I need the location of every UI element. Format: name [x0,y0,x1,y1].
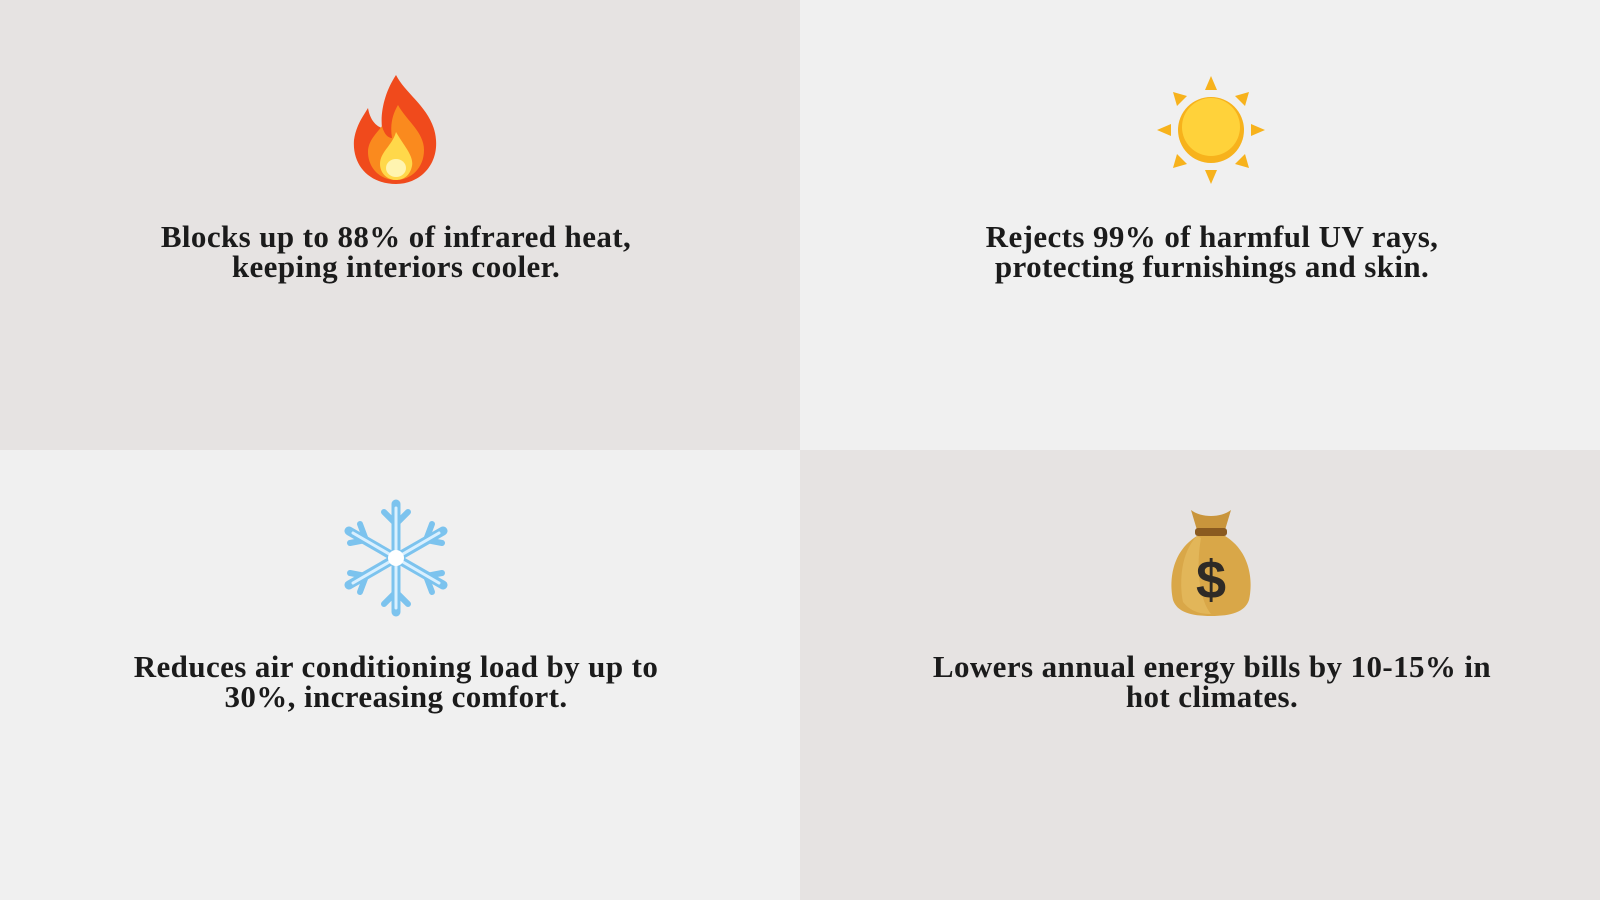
icon: snowflake [344,500,448,616]
text: energy bills [933,649,1491,714]
text: UV rays [986,219,1438,284]
panel: UV rays [800,0,1600,450]
text: infrared heat: keeping interiors cooler. [232,249,560,284]
icon: sun [1157,76,1265,184]
icon: fire [354,75,436,184]
icon: money bag [1171,510,1251,616]
panel: energy bills [800,450,1600,900]
text: air conditioning: Reduces air conditioning load by up to [134,649,658,684]
panel: infrared heat [0,0,800,450]
text: air conditioning [134,649,658,714]
text: air conditioning: 30%, increasing comfort. [224,679,568,714]
text: UV rays: Rejects 99% of harmful UV rays, [986,219,1438,254]
text: infrared heat: Blocks up to 88% of infrared heat, [161,219,631,254]
text: infrared heat [161,219,631,284]
text: energy bills: hot climates. [1126,679,1298,714]
text: UV rays: protecting furnishings and skin. [995,249,1429,284]
panel: air conditioning [0,450,800,900]
text: energy bills: Lowers annual energy bills by 10-15% in [933,649,1491,684]
icon: money bag: $ [1196,550,1226,610]
